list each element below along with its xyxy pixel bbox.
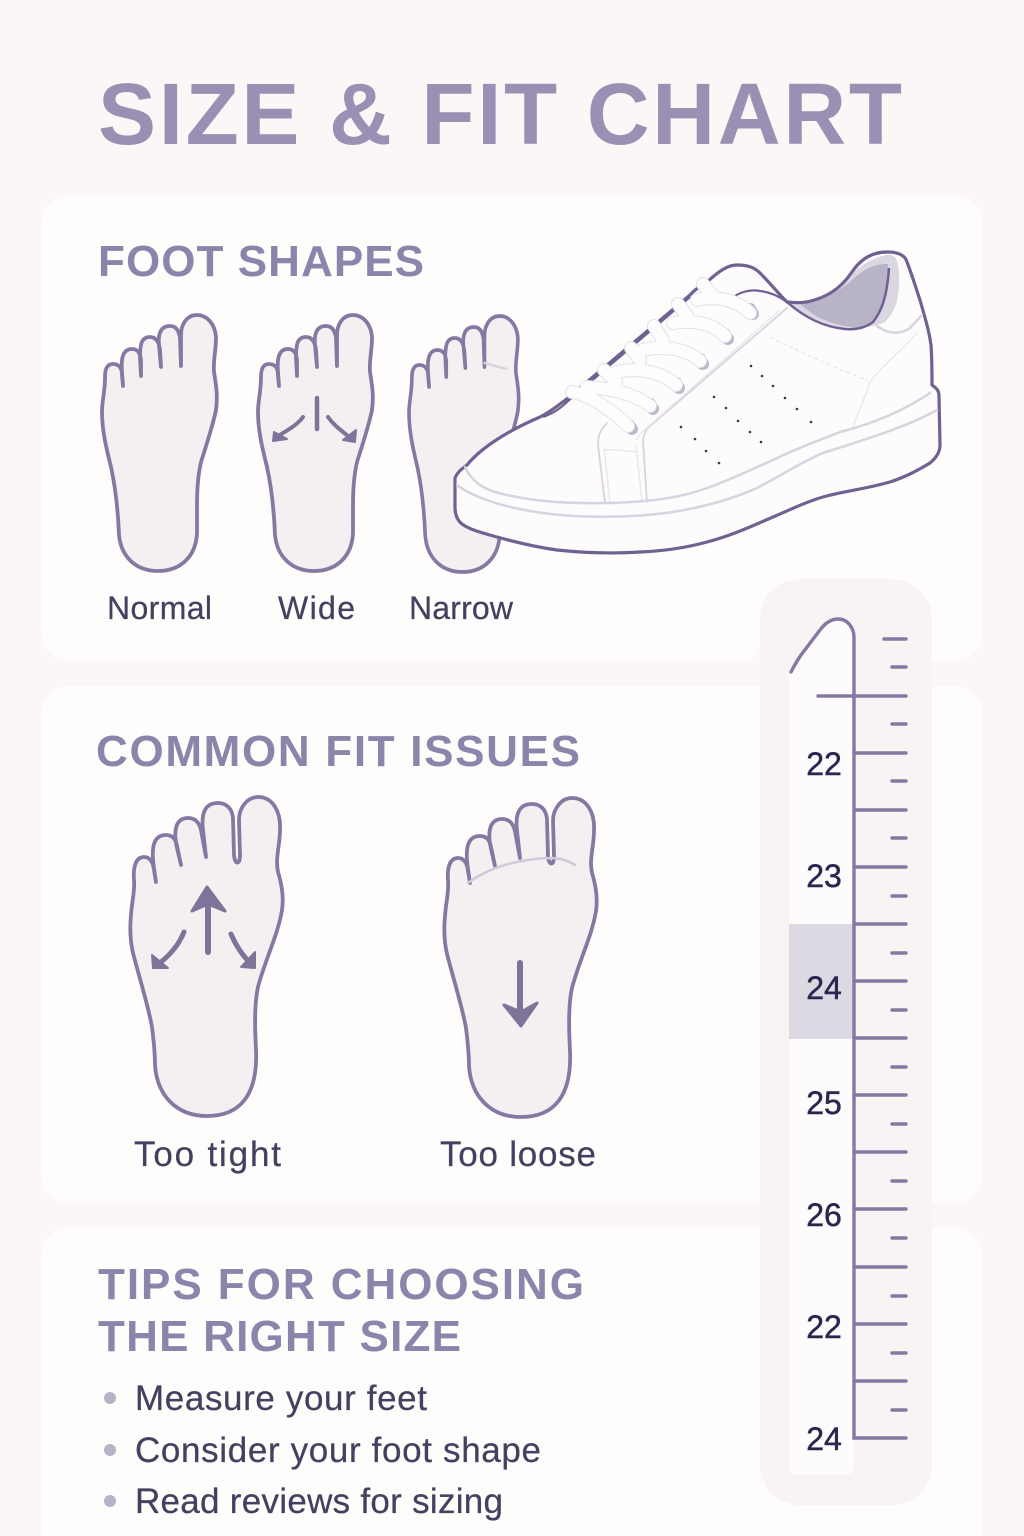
panel: foot shapes [41,195,982,661]
highlighted size 24 [789,924,853,1039]
ruler numbers: 26 [806,1197,842,1233]
foot: normal [102,315,217,571]
shoe collar lining [787,252,899,329]
ruler numbers: 24 [806,1421,842,1457]
shoe seams [457,290,937,517]
label: narrow: Narrow [409,590,514,626]
panel: common fit issues [41,686,982,1203]
ruler numbers [806,746,842,1457]
ruler numbers: 22 [806,1309,842,1345]
ruler numbers: 22 [806,746,842,782]
panel: tips [41,1228,982,1536]
label: normal: Normal [107,590,212,626]
shoe eyelet dots [680,365,812,464]
heading: tips: THE RIGHT SIZE [98,1312,461,1361]
heading: tips: TIPS FOR CHOOSING [98,1260,584,1309]
ruler outline [791,619,906,1438]
foot: narrow [409,316,519,572]
ruler tray [745,579,932,1505]
title: SIZE & FIT CHART [98,66,902,163]
ruler numbers: 24 [806,970,842,1006]
ruler ticks [818,639,906,1410]
foot: too tight [130,797,283,1116]
ruler numbers: 23 [806,858,842,894]
shoe laces [572,284,753,429]
tip 2: Consider your foot shape [135,1431,541,1470]
label: too loose: Too loose [440,1135,596,1174]
label: too tight: Too tight [134,1135,281,1174]
heading: foot shapes: FOOT SHAPES [98,237,424,286]
label: wide: Wide [278,590,355,626]
shoe illustration [455,252,940,553]
heading: common fit issues: COMMON FIT ISSUES [96,727,580,776]
foot: wide [258,315,373,571]
tip 3: Read reviews for sizing [135,1482,503,1521]
foot: too loose [444,798,597,1117]
ruler numbers: 25 [806,1085,842,1121]
heading: tips [98,1260,584,1361]
tip 1: Measure your feet [135,1379,427,1418]
ruler strip [789,621,854,1475]
